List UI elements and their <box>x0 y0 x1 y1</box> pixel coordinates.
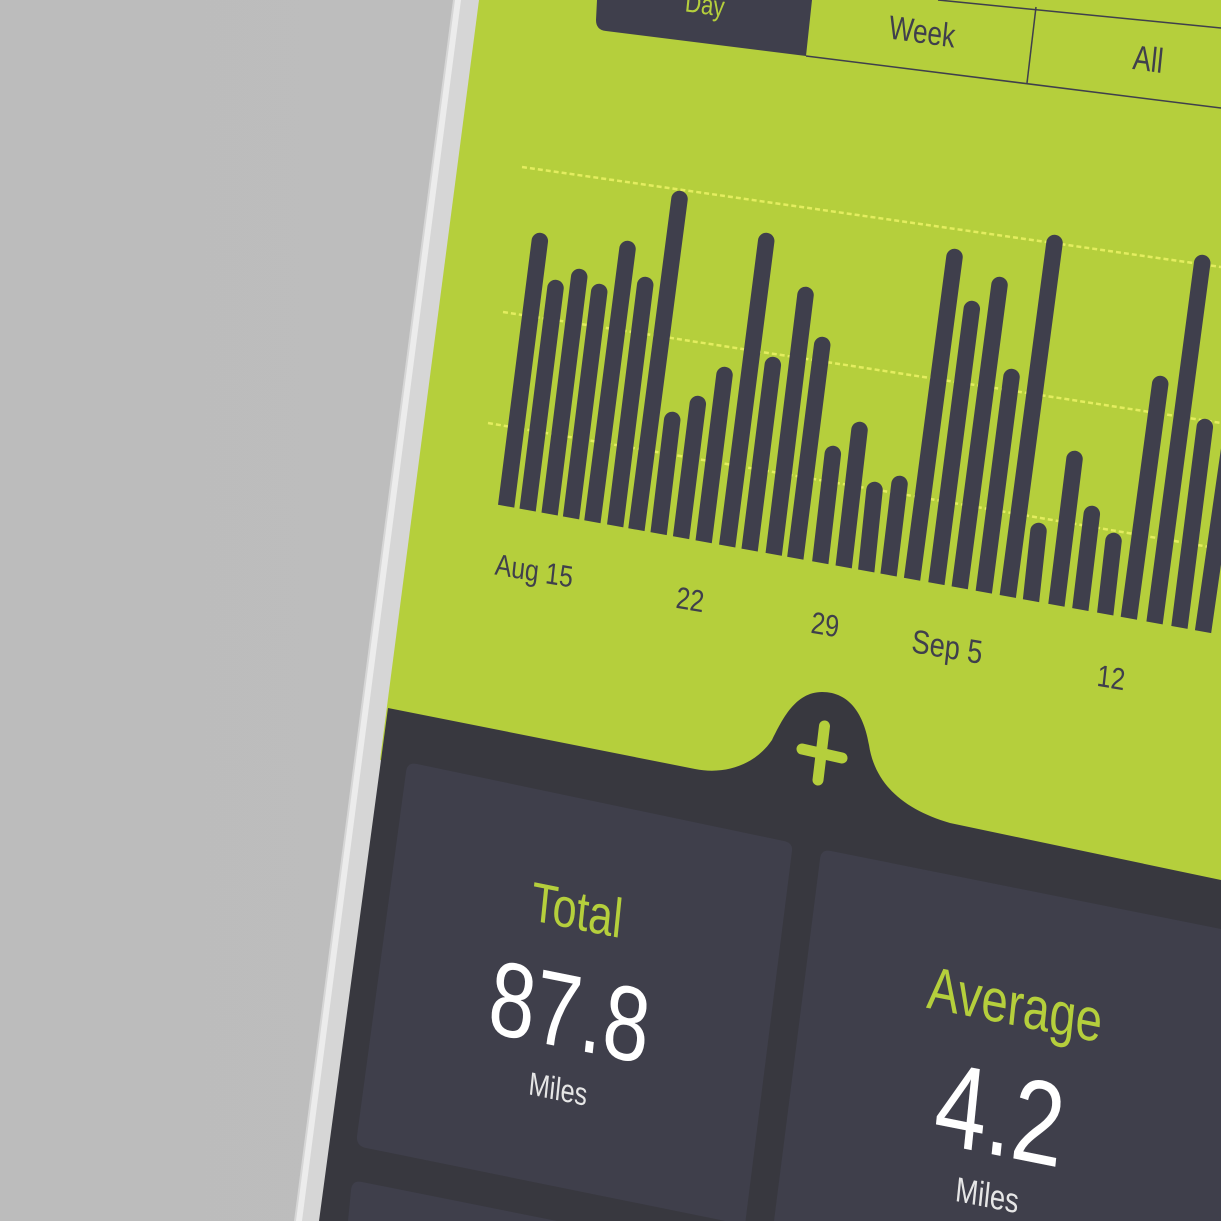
bar chart <box>488 167 1221 697</box>
tab outlines <box>806 0 1221 108</box>
tab: Day selected <box>596 0 812 56</box>
unit: Miles: Miles <box>527 1067 589 1114</box>
value: 4.2: 4.2 <box>929 1035 1071 1193</box>
phone frame edge <box>294 0 1221 1221</box>
tab: Week: Week <box>887 10 958 55</box>
green screen panel <box>380 0 1221 900</box>
label: Total: Total <box>528 870 625 950</box>
date axis labels: 12 <box>1095 659 1127 697</box>
bars <box>505 199 1221 641</box>
dark lower panel with add-button tab <box>319 692 1221 1221</box>
card: lower partial <box>348 1182 557 1221</box>
dotted grid lines <box>488 167 1221 549</box>
date axis labels: 22 <box>674 581 706 619</box>
phone app scene <box>294 0 1221 1221</box>
label: Average: Average <box>925 954 1106 1056</box>
icon: plus <box>802 726 842 780</box>
value: 87.8: 87.8 <box>484 938 655 1087</box>
date axis labels: Aug 15 <box>494 547 575 594</box>
unit: Miles: Miles <box>954 1170 1021 1221</box>
card: total <box>357 764 792 1221</box>
date axis labels <box>494 547 1127 697</box>
tab: All: All <box>1131 38 1165 81</box>
date axis labels: Sep 5 <box>910 623 984 672</box>
period selector tabs <box>596 0 1221 108</box>
date axis labels: 29 <box>809 606 841 644</box>
card: average <box>774 851 1221 1221</box>
